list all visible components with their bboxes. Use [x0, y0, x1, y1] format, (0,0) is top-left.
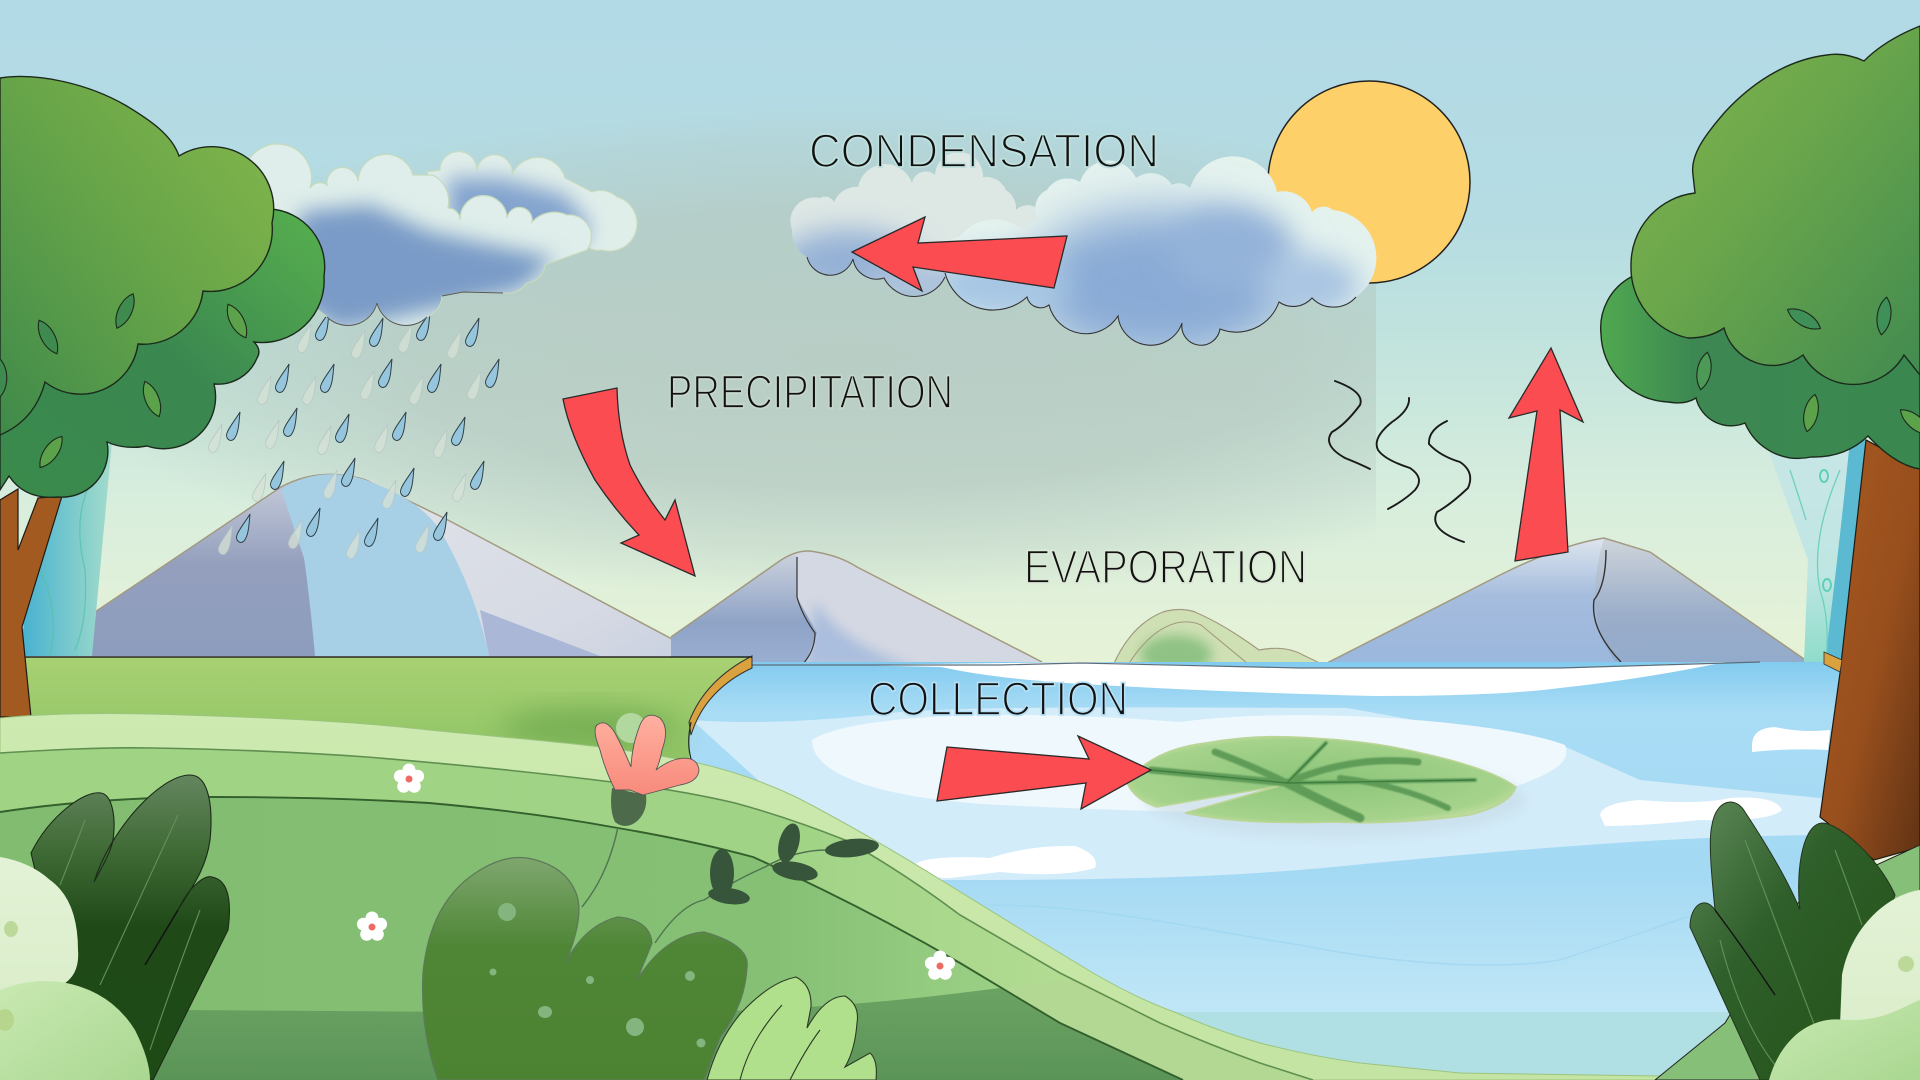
left pale bushes [0, 857, 150, 1080]
right bank ledge [1824, 652, 1842, 672]
front cloud: condensation large [944, 156, 1376, 346]
label: evaporation: EVAPORATION [1024, 541, 1307, 594]
white flowers [357, 764, 955, 980]
right tree trunk [1820, 440, 1920, 860]
ghost tree: right [1766, 440, 1868, 662]
sky right of haze [1376, 100, 1676, 660]
arrow: evaporation [1509, 348, 1583, 561]
sprig [655, 821, 880, 943]
leaves [0, 291, 252, 471]
bank edge [689, 656, 752, 735]
hill mid layer [0, 748, 1313, 1080]
right pale bushes [1769, 890, 1920, 1080]
leaves [1694, 296, 1920, 439]
teal shallows [1170, 1012, 1770, 1078]
white reflection cloud [812, 715, 1566, 813]
hill shade [130, 988, 1183, 1080]
ghost drops [209, 324, 481, 558]
pale reflection band [692, 707, 1840, 880]
rain cloud [240, 140, 640, 330]
left tree foliage [0, 77, 325, 497]
right lower hill [1655, 845, 1920, 1080]
left dark plant [31, 775, 229, 1080]
ghost tree: left [20, 442, 112, 656]
left river bank [20, 656, 752, 762]
foreground hill [0, 713, 1660, 1080]
waterfall [281, 474, 489, 656]
label: precipitation: PRECIPITATION [667, 366, 953, 419]
water reflection ripple [990, 905, 1720, 965]
right tree foliage [1601, 26, 1920, 469]
arrow: precipitation [563, 388, 695, 576]
hill low layer [0, 797, 1183, 1080]
left tree trunk [0, 489, 62, 717]
foam line [850, 662, 1725, 696]
right dark plant [1690, 802, 1895, 1080]
label: collection: COLLECTION [868, 673, 1128, 726]
mountain: centre [671, 551, 1042, 668]
lily pad [1127, 737, 1525, 838]
back cloud: condensation small [790, 152, 1039, 297]
hill: centre green [1112, 610, 1330, 675]
arrow: condensation [852, 217, 1067, 291]
mountain: right [1323, 538, 1804, 668]
sun [1268, 81, 1470, 283]
haze behind clouds [50, 100, 1650, 600]
solid drops [227, 312, 499, 546]
centre bush [423, 858, 747, 1080]
rain drops [209, 312, 499, 558]
arrow: collection [937, 736, 1151, 809]
flower with stem [582, 713, 699, 907]
label: condensation: CONDENSATION [809, 125, 1159, 178]
light green bush [707, 977, 876, 1080]
heat waves [1329, 381, 1470, 542]
water: lake [680, 662, 1860, 1080]
mountain: left [92, 474, 704, 656]
white patches on water [1752, 727, 1830, 752]
